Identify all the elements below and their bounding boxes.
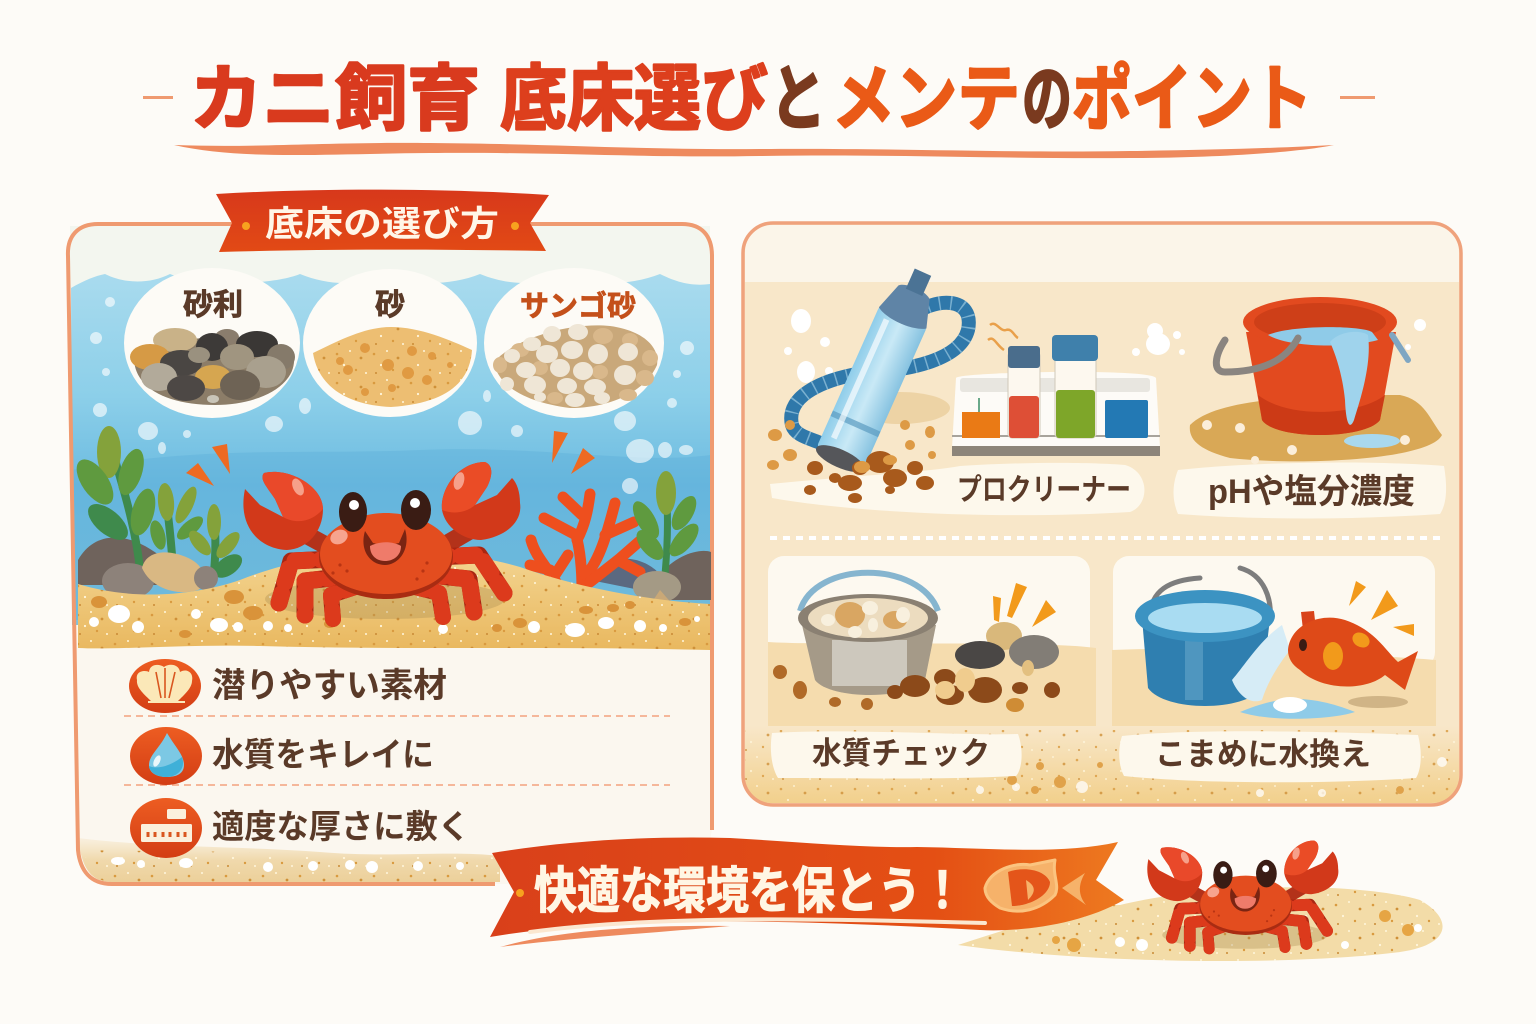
title: カニ飼育 xyxy=(190,60,480,140)
title: と xyxy=(770,60,826,140)
banner: substrate heading xyxy=(216,190,549,252)
label: pro cleaner: プロクリーナー xyxy=(957,474,1131,507)
banner: keep environment comfortable: 快適な環境を保とう！ xyxy=(534,863,964,919)
icon: fish outline xyxy=(985,860,1086,911)
label: pH and salinity xyxy=(1174,463,1446,518)
item: test tray xyxy=(952,335,1160,456)
panel: maintenance tips xyxy=(743,223,1461,805)
card: water quality check xyxy=(768,556,1096,726)
gravel bubble: 砂利 xyxy=(183,289,243,322)
title: メンテ xyxy=(832,60,1020,140)
bubbles xyxy=(90,297,694,494)
title: の xyxy=(1022,60,1072,140)
list: substrate points xyxy=(124,659,670,858)
sand bubble: 砂 xyxy=(375,289,405,322)
panel: substrate selection xyxy=(68,224,712,884)
text: moderate depth: 適度な厚さに敷く xyxy=(212,808,470,845)
text: burrowing material: 潜りやすい素材 xyxy=(212,667,447,705)
icon: water drop xyxy=(130,727,202,785)
item: red bucket xyxy=(1132,297,1442,464)
coral and seaweed right xyxy=(530,471,711,614)
coral sand bubble xyxy=(484,268,664,418)
title: ポイント xyxy=(1072,60,1312,140)
card: water change xyxy=(1112,556,1436,726)
icon: depth scale xyxy=(130,798,202,858)
title xyxy=(143,60,1375,158)
sand floor xyxy=(78,552,710,650)
label: pH and salinity: pHや塩分濃度 xyxy=(1208,473,1415,511)
coral sand bubble: サンゴ砂 xyxy=(520,289,636,323)
sand base strip xyxy=(745,726,1459,803)
water xyxy=(71,274,710,625)
label: water quality check xyxy=(771,731,1022,778)
gravel bubble xyxy=(124,268,300,418)
banner: substrate heading: 底床の選び方 xyxy=(265,205,499,244)
main crab with motion marks xyxy=(186,431,595,619)
lower sand strip xyxy=(78,838,500,882)
label: water change xyxy=(1119,731,1421,782)
label: water quality check: 水質チェック xyxy=(812,736,990,771)
small crab xyxy=(1147,840,1338,949)
banner: keep environment comfortable xyxy=(490,838,1443,961)
item: pro cleaner xyxy=(767,262,1018,503)
text: keep water clean: 水質をキレイに xyxy=(212,736,434,773)
title: 底床選び xyxy=(500,60,768,140)
label: water change: こまめに水換え xyxy=(1155,737,1371,772)
divider xyxy=(770,536,1440,540)
icon: shell xyxy=(129,659,201,713)
seaweed left xyxy=(69,426,246,599)
sand bubble xyxy=(303,269,477,417)
label: pro cleaner xyxy=(770,463,1144,515)
